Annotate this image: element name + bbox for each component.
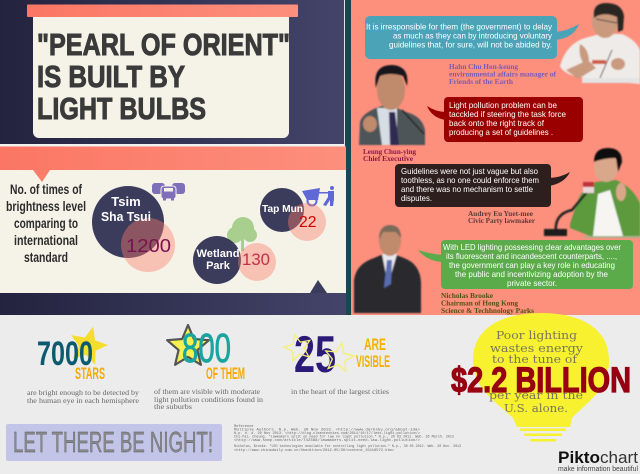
- quote: Audrey: and there was no mechanism to settle: [401, 184, 533, 194]
- stat: 800 of them: 800: [182, 325, 231, 371]
- title: [37, 27, 290, 126]
- quote: Hahn: It is irresponsible for them (the government) to delay: [366, 22, 553, 32]
- icon: tree: [227, 217, 257, 251]
- photo: Audrey Eu: [544, 148, 640, 238]
- panel: brightness comparison: [0, 146, 346, 315]
- bubble: Tsim Sha Tsui 1200: 1200: [126, 236, 171, 256]
- quote: Leung: back onto the right track of: [449, 118, 545, 128]
- quote: Hahn: [365, 16, 579, 59]
- name: Audrey: Audrey Eu Yuet-mee: [468, 209, 534, 218]
- photo: Leung Chun-ying: [359, 65, 425, 145]
- brightness description text: No. of times of: [10, 181, 82, 197]
- panel: title header: [0, 0, 345, 146]
- stat: 7000 stars: [27, 322, 140, 405]
- icon: cars: [152, 183, 185, 200]
- quote: Leung: producing a set of guidelines .: [449, 127, 553, 137]
- light bulb callout: wastes energy: [490, 342, 584, 355]
- bubble: Wetland Park 130: Park: [206, 260, 231, 272]
- stat: 25 are visible: 25: [294, 326, 336, 384]
- banner: let there be night: LET THERE BE NIGHT!: [13, 427, 213, 459]
- name: Leung: Chief Executive: [363, 154, 414, 163]
- quote: Leung: [427, 97, 583, 142]
- references: N.p. n. d. 20 Nov 2013. <http://blog.cleantechies.com/2011/10/17/leds-light-pollution/>: [234, 431, 420, 436]
- references: <http://www.chinadaily.com.cn/hkedition/2012-05/30/content_15418572.htm>: [234, 448, 394, 453]
- title card: [27, 4, 298, 138]
- stat: 800 of them: [154, 325, 264, 411]
- name: Nicholas: Chairman of Hong Kong: [441, 298, 518, 308]
- logo: Piktochart: Pikto: [558, 448, 600, 467]
- quote: Audrey: toothless, as no one could enforce them: [401, 175, 539, 185]
- quote: Hahn: as much as they can by introducing voluntary: [393, 30, 553, 40]
- quote: Nicholas: the public and incentivizing adoption by the: [455, 269, 608, 279]
- panel: quotes: [351, 0, 640, 315]
- references: Reference: [234, 424, 253, 429]
- title: LIGHT BULBS: [37, 91, 206, 126]
- name: Nicholas: [441, 291, 534, 315]
- photo: Nicholas Brooke: [354, 225, 421, 313]
- title: IS BUILT BY: [37, 59, 185, 94]
- light bulb callout: U.S. alone.: [504, 402, 568, 415]
- quote: Audrey: [395, 164, 570, 207]
- name: Hahn: environmental affairs manager of: [449, 70, 556, 78]
- name: Hahn: Friends of the Earth: [449, 77, 514, 86]
- bubble: Wetland Park 130: 130: [242, 251, 270, 269]
- stat: 25 are visible: [282, 326, 390, 396]
- references: Chi-fai, Cheung. "Lawmakers split on need for law on light pollution." N.p., 26 03 2011. Web. 26 March. 2012: [234, 434, 454, 440]
- logo: Piktochart: chart: [600, 448, 638, 467]
- stat: 25 are visible: in the heart of the largest cities: [291, 388, 389, 396]
- quote: Hahn: guidelines that, for sure, will not be abided by.: [389, 40, 552, 50]
- light bulb callout: [451, 313, 631, 442]
- references: <http://www.scmp.com/article/742388/lawmakers-split-need-law-light-pollution/>: [234, 438, 420, 443]
- light bulb callout: Poor lighting: [496, 329, 577, 342]
- icon: star: [167, 325, 209, 365]
- icon: bulb: [473, 313, 609, 442]
- stat: 25 are visible: VISIBLE: [356, 352, 390, 371]
- stat: 25 are visible: ARE: [364, 335, 386, 354]
- quote: Audrey: Guidelines were not just vague but also: [401, 166, 538, 176]
- quote: Leung: Light pollution problem can be: [449, 100, 557, 110]
- quote: Leung: tacckled if steering the task force: [449, 109, 566, 119]
- bubble: Tap Mun 22: [260, 188, 326, 241]
- light bulb callout: per year in the: [489, 389, 583, 402]
- bubble: Tap Mun 22: Tap Mun: [262, 204, 303, 215]
- references: Nicholas, Brooke. "LED technologies available for controlling light pollution." N.p., 30 05 2012. Web. 20 Nov. 2013: [234, 444, 461, 449]
- bubble: Tsim Sha Tsui 1200: Sha Tsui: [101, 209, 151, 224]
- name: Hahn: [449, 62, 556, 86]
- quote: Nicholas: [418, 240, 633, 289]
- bubble: Tsim Sha Tsui 1200: Tsim: [111, 194, 141, 209]
- light bulb callout: to the tune of: [492, 353, 578, 366]
- quote: Nicholas: its fluorescent and incandescent counterparts, ....,: [446, 251, 617, 261]
- references: Multiple Authors. N.p. Web. 20 Nov 2013. <http://www.darksky.org/about-ida>: [234, 428, 420, 432]
- brightness description text: [6, 181, 86, 265]
- references: [234, 424, 461, 453]
- brightness description text: standard: [24, 249, 68, 265]
- stat: 7000 stars: 7000: [37, 335, 93, 373]
- bubble: Wetland Park 130: Wetland: [196, 248, 240, 260]
- icon: cart and person: [302, 186, 334, 206]
- stat: 800 of them: OF THEM: [206, 364, 245, 383]
- icon: outlined stars: [282, 331, 356, 372]
- icon: star: [65, 322, 112, 367]
- quote: Nicholas: private sector.: [507, 278, 557, 288]
- name: Leung: Leung Chun-ying: [363, 147, 416, 156]
- bubble: Wetland Park 130: [193, 236, 276, 284]
- name: Audrey: Civic Party lawmaker: [468, 216, 536, 225]
- brightness description text: comparing to: [14, 215, 78, 231]
- stat: 7000 stars: are bright enough to be detected by: [27, 389, 140, 397]
- quote: Nicholas: the government can play a key role in educating: [449, 260, 615, 270]
- photo: Hahn Chu Hon-keung: [560, 3, 640, 84]
- quote: Audrey: disputes.: [401, 193, 432, 203]
- quote: Nicholas: With LED lighting possessing clear advantages over: [443, 242, 621, 252]
- stat: 800 of them: light pollution conditions found in: [154, 396, 264, 404]
- bubble: Tap Mun 22: 22: [299, 214, 317, 231]
- name: Hahn: Hahn Chu Hon-keung: [449, 62, 518, 71]
- brightness description text: brightness level: [6, 198, 86, 214]
- logo: Piktochart: [558, 448, 638, 473]
- stat: 7000 stars: STARS: [75, 364, 105, 383]
- name: Leung: [363, 147, 416, 163]
- name: Nicholas: Nicholas Brooke: [441, 291, 494, 300]
- stat: 7000 stars: the human eye in each hemisphere: [27, 397, 139, 405]
- bubble: Tsim Sha Tsui 1200: [92, 186, 175, 272]
- name: Audrey: [468, 209, 536, 225]
- stat: 800 of them: the suburbs: [154, 403, 192, 411]
- name: Nicholas: Science & Techhnology Parks: [441, 306, 534, 315]
- title: "PEARL OF ORIENT": [37, 27, 290, 62]
- banner: let there be night: [6, 424, 222, 461]
- logo: Piktochart: make information beautiful: [558, 466, 638, 473]
- brightness description text: international: [14, 232, 78, 248]
- stat: 800 of them: of them are visible with moderate: [154, 388, 260, 396]
